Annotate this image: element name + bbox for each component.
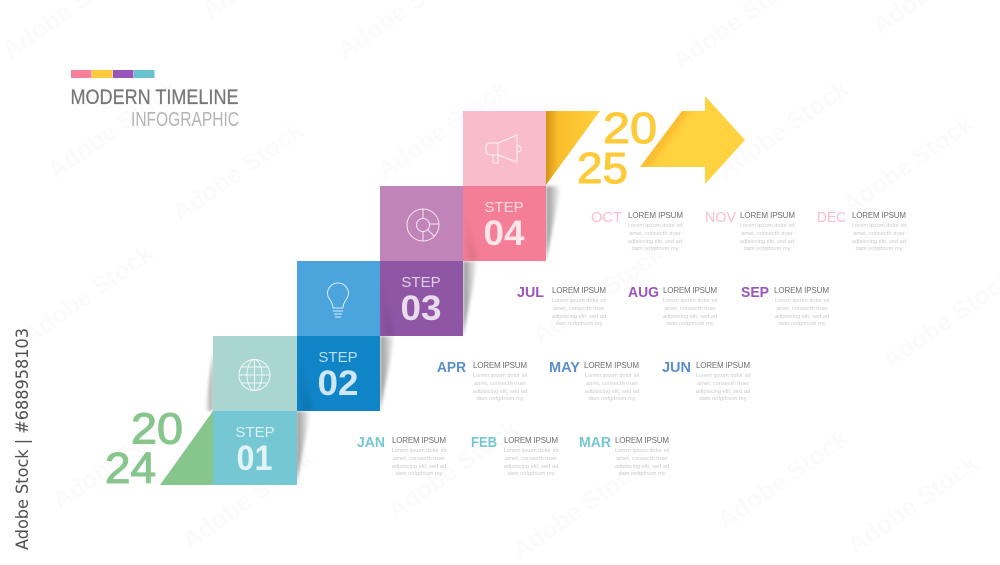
month: FEB: FEB xyxy=(471,435,497,451)
month: DEC: Lorem ipsum dolor sit xyxy=(852,223,907,229)
panel: step 03: 03 xyxy=(400,289,442,328)
month: MAR xyxy=(579,435,670,477)
year 2025 with arrow: 25 xyxy=(577,144,628,193)
panel: step 03 xyxy=(380,186,463,336)
month: JAN: dam nofgdnum my xyxy=(395,471,443,477)
month: MAR: MAR xyxy=(579,435,612,451)
month: MAY: amet, consecth truer xyxy=(586,381,638,387)
text: Adobe Stock xyxy=(177,444,319,555)
text: Adobe Stock xyxy=(167,116,309,227)
title: INFOGRAPHIC xyxy=(131,109,239,131)
arrow xyxy=(635,96,745,184)
month: JUL: JUL xyxy=(517,285,544,301)
month: DEC: LOREM IPSUM xyxy=(852,211,906,220)
panel: step 02: 02 xyxy=(318,364,358,403)
month: SEP xyxy=(741,285,830,327)
panel: step 01: 01 xyxy=(236,439,272,478)
month: OCT: LOREM IPSUM xyxy=(628,211,683,220)
month: JUL: adipiscing elit, sed ad xyxy=(552,314,606,320)
month: SEP: SEP xyxy=(741,285,769,301)
month: APR: amet, consecth truer xyxy=(474,381,526,387)
panel: step 04 xyxy=(463,111,546,261)
text: Adobe Stock xyxy=(837,109,979,220)
month: MAY: LOREM IPSUM xyxy=(584,361,639,370)
year 2025 with arrow: 20 xyxy=(603,104,657,153)
month: MAR: Lorem ipsum dolor sit xyxy=(615,448,670,454)
panel: step 03: STEP xyxy=(401,274,441,291)
month: NOV: amet, consecth truer xyxy=(741,231,793,237)
month: NOV: Lorem ipsum dolor sit xyxy=(740,223,795,229)
text: Adobe Stock xyxy=(372,74,514,185)
month: AUG: adipiscing elit, sed ad xyxy=(663,314,717,320)
month: AUG: dam nofgdnum my xyxy=(666,321,714,327)
month: JUN: LOREM IPSUM xyxy=(696,361,750,370)
month: JUN: JUN xyxy=(662,360,691,376)
title: MODERN TIMELINE xyxy=(70,86,238,109)
month: MAY xyxy=(549,360,640,402)
month: AUG: AUG xyxy=(628,285,659,301)
month: JUL: amet, consecth truer xyxy=(553,306,605,312)
month: SEP: dam nofgdnum my xyxy=(778,321,826,327)
month: DEC: adipiscing elit, sed ad xyxy=(852,239,906,245)
panel: step 04: 04 xyxy=(484,214,525,253)
panel: step 04: STEP xyxy=(484,199,524,216)
month: JAN xyxy=(357,435,447,477)
month: NOV: dam nofgdnum my xyxy=(743,246,791,252)
month: FEB: adipiscing elit, sed ad xyxy=(504,464,558,470)
text: Adobe Stock xyxy=(712,74,854,185)
month: DEC xyxy=(817,210,907,252)
month: FEB: amet, consecth truer xyxy=(505,456,557,462)
month: DEC: amet, consecth truer xyxy=(853,231,905,237)
text: Adobe Stock xyxy=(42,74,184,185)
month: JUL: LOREM IPSUM xyxy=(552,286,606,295)
month: SEP: Lorem ipsum dolor sit xyxy=(775,298,830,304)
month: JUL xyxy=(517,285,607,327)
panel: step shadows xyxy=(205,186,561,485)
month: OCT: adipiscing elit, sed ad xyxy=(628,239,682,245)
month: MAY: Lorem ipsum dolor sit xyxy=(585,373,640,379)
month: MAR: adipiscing elit, sed ad xyxy=(615,464,669,470)
month: MAR: dam nofgdnum my xyxy=(618,471,666,477)
month: SEP: amet, consecth truer xyxy=(776,306,828,312)
month: APR: Lorem ipsum dolor sit xyxy=(473,373,528,379)
year 2024: 20 xyxy=(131,404,183,454)
month: AUG: LOREM IPSUM xyxy=(663,286,717,295)
year 2025 with arrow xyxy=(546,96,745,193)
month: DEC: dam nofgdnum my xyxy=(855,246,903,252)
color bars xyxy=(71,70,154,78)
month: OCT: amet, consecth truer xyxy=(629,231,681,237)
text: Adobe Stock xyxy=(382,414,524,525)
month: AUG: Lorem ipsum dolor sit xyxy=(663,298,718,304)
month: MAR: amet, consecth truer xyxy=(616,456,668,462)
month: NOV: LOREM IPSUM xyxy=(740,211,795,220)
text: Adobe Stock xyxy=(17,239,159,350)
month: FEB: Lorem ipsum dolor sit xyxy=(504,448,559,454)
month: SEP: LOREM IPSUM xyxy=(774,286,829,295)
month: JUN: adipiscing elit, sed ad xyxy=(696,389,750,395)
month: FEB xyxy=(471,435,559,477)
month: JAN: amet, consecth truer xyxy=(393,456,445,462)
month: JUL: dam nofgdnum my xyxy=(555,321,603,327)
month: JAN: LOREM IPSUM xyxy=(392,436,446,445)
icon: globe xyxy=(239,360,270,390)
month: SEP: adipiscing elit, sed ad xyxy=(775,314,829,320)
month: FEB: dam nofgdnum my xyxy=(507,471,555,477)
month: JAN: JAN xyxy=(357,435,385,451)
month: APR: adipiscing elit, sed ad xyxy=(473,389,527,395)
text: Adobe Stock xyxy=(47,404,189,515)
panel: step 02: STEP xyxy=(318,349,358,366)
month: JAN: Lorem ipsum dolor sit xyxy=(392,448,447,454)
text: Adobe Stock xyxy=(527,239,669,350)
text: Adobe Stock xyxy=(507,454,649,565)
panel: step 01: STEP xyxy=(235,424,275,441)
month: JUN: dam nofgdnum my xyxy=(699,396,747,402)
month: JUL: Lorem ipsum dolor sit xyxy=(552,298,607,304)
month: AUG: amet, consecth truer xyxy=(664,306,716,312)
month: OCT: dam nofgdnum my xyxy=(631,246,679,252)
month: FEB: LOREM IPSUM xyxy=(504,436,558,445)
month: AUG xyxy=(628,285,718,327)
year 2024: 24 xyxy=(105,444,156,493)
month: MAY: MAY xyxy=(549,360,580,376)
panel: step 01 xyxy=(213,336,297,485)
month: APR: dam nofgdnum my xyxy=(476,396,524,402)
month: JUN xyxy=(662,360,751,402)
month: NOV: adipiscing elit, sed ad xyxy=(740,239,794,245)
icon: megaphone xyxy=(486,135,521,163)
text: Adobe Stock xyxy=(842,449,984,560)
text: Adobe Stock xyxy=(712,424,854,535)
month: NOV: NOV xyxy=(705,210,736,226)
month: NOV xyxy=(705,210,795,252)
month: APR: APR xyxy=(437,360,466,376)
month: APR: LOREM IPSUM xyxy=(473,361,527,370)
month: MAR: LOREM IPSUM xyxy=(615,436,669,445)
month: JUN: Lorem ipsum dolor sit xyxy=(696,373,751,379)
month: DEC: DEC xyxy=(817,210,846,226)
icon: donut chart xyxy=(407,209,439,241)
icon: light bulb xyxy=(328,283,348,317)
title xyxy=(70,86,239,131)
month: APR xyxy=(437,360,528,402)
stock credit: Adobe Stock | #688958103 xyxy=(13,328,33,550)
month: OCT xyxy=(591,210,683,252)
month: OCT: Lorem ipsum dolor sit xyxy=(628,223,683,229)
month: MAY: adipiscing elit, sed ad xyxy=(585,389,639,395)
month: JUN: amet, consecth truer xyxy=(697,381,749,387)
month: MAY: dam nofgdnum my xyxy=(588,396,636,402)
year 2024 xyxy=(105,404,213,493)
month: JAN: adipiscing elit, sed ad xyxy=(392,464,446,470)
month: OCT: OCT xyxy=(591,210,622,226)
panel: step 02 xyxy=(297,261,380,411)
